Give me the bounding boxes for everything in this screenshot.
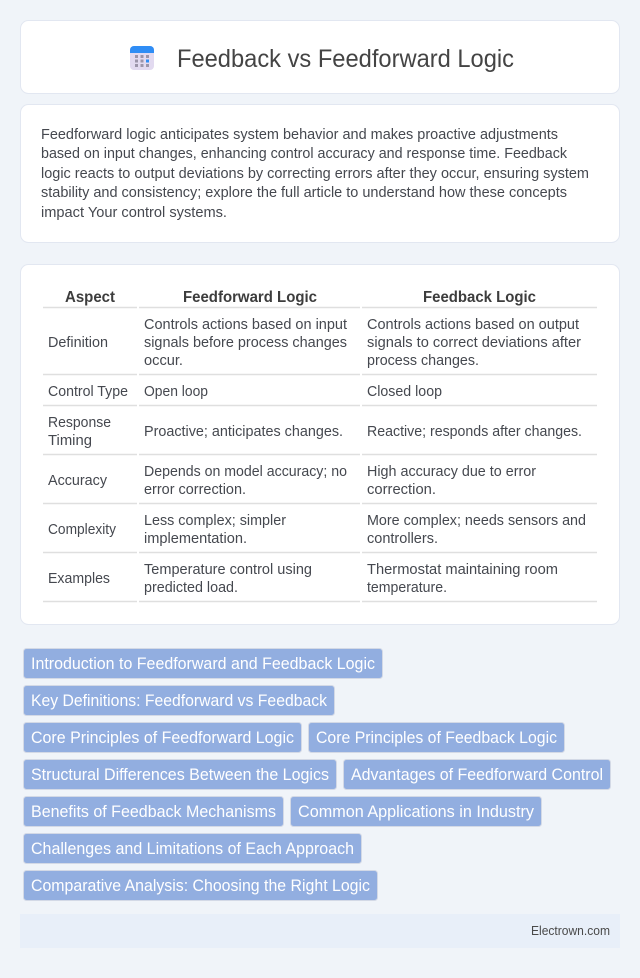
summary text: impact Your control systems.: [41, 205, 227, 221]
row: control type: Open loop: [144, 384, 208, 400]
row: accuracy: High accuracy due to error: [367, 464, 536, 480]
summary text: [41, 127, 589, 221]
tag: introduction: [24, 648, 382, 678]
tag: comparative analysis: [24, 870, 378, 900]
row: definition: occur.: [144, 353, 183, 369]
row: complexity: controllers.: [367, 531, 438, 547]
row: examples: predicted load.: [144, 580, 238, 596]
tag: structural differences: [24, 760, 336, 790]
row: examples: Temperature control using: [144, 562, 312, 578]
tag: key definitions: [24, 686, 334, 716]
tag: challenges: [24, 834, 362, 864]
table header row: Aspect: [65, 289, 115, 306]
row: definition: signals before process changes: [144, 335, 347, 351]
row: control type: [43, 384, 597, 406]
table header row: Feedback Logic: [423, 289, 536, 306]
row: definition: Controls actions based on output: [367, 317, 579, 333]
row: control type: Control Type: [48, 384, 128, 400]
summary text: stability and consistency; explore the full article to understand how these concepts: [41, 185, 567, 201]
tag: comparative analysis: Comparative Analysis: Choosing the Right Logic: [31, 877, 370, 895]
tag: core principles feedback: [308, 722, 564, 752]
row: accuracy: correction.: [367, 482, 436, 498]
row: response timing: [43, 415, 597, 454]
row: definition: process changes.: [367, 353, 479, 369]
summary text: Feedforward logic anticipates system behavior and makes proactive adjustments: [41, 127, 558, 143]
tag: advantages: Advantages of Feedforward Control: [351, 766, 603, 784]
row: complexity: Complexity: [48, 522, 117, 538]
summary text: based on input changes, enhancing control accuracy and response time. Feedback: [41, 146, 568, 162]
tag: key definitions: Key Definitions: Feedforward vs Feedback: [31, 692, 328, 710]
row: definition: [43, 317, 597, 374]
tag: introduction: Introduction to Feedforward and Feedback Logic: [31, 655, 375, 673]
summary text: logic reacts to output deviations by correcting errors after they occur, ensuring system: [41, 166, 589, 182]
row: accuracy: Depends on model accuracy; no: [144, 464, 347, 480]
footer source text: Electrown.com: [531, 924, 610, 938]
row: examples: [43, 562, 597, 602]
row: complexity: implementation.: [144, 531, 247, 547]
row: response timing: Reactive; responds after changes.: [367, 424, 582, 440]
row: definition: Definition: [48, 335, 108, 351]
panel: header: [20, 20, 620, 94]
row: accuracy: [43, 464, 597, 504]
tag: challenges: Challenges and Limitations of Each Approach: [31, 840, 354, 858]
table header row: [43, 289, 597, 308]
tag: applications: [290, 796, 542, 826]
tag: core principles feedforward: Core Principles of Feedforward Logic: [31, 729, 294, 747]
title: Feedback vs Feedforward Logic: [177, 45, 514, 73]
tag: applications: Common Applications in Industry: [298, 803, 535, 821]
panel: comparison table: [20, 264, 620, 624]
panel: summary: [20, 104, 620, 242]
row: response timing: Proactive; anticipates changes.: [144, 424, 343, 440]
tag: benefits: [24, 796, 284, 826]
row: response timing: Timing: [48, 433, 92, 449]
row: examples: Examples: [48, 571, 110, 587]
icon: calendar: [130, 46, 154, 70]
row: examples: temperature.: [367, 580, 447, 596]
tag: benefits: Benefits of Feedback Mechanisms: [31, 803, 276, 821]
footer: [20, 914, 620, 948]
row: examples: Thermostat maintaining room: [367, 562, 558, 578]
row: complexity: Less complex; simpler: [144, 513, 286, 529]
tag: core principles feedforward: [24, 722, 302, 752]
row: definition: Controls actions based on input: [144, 317, 347, 333]
table header row: Feedforward Logic: [183, 289, 317, 306]
row: control type: Closed loop: [367, 384, 442, 400]
row: accuracy: error correction.: [144, 482, 246, 498]
topic tags: [24, 648, 610, 900]
row: accuracy: Accuracy: [48, 473, 108, 489]
row: definition: signals to correct deviations after: [367, 335, 581, 351]
row: response timing: Response: [48, 415, 111, 431]
row: complexity: More complex; needs sensors and: [367, 513, 586, 529]
row: complexity: [43, 513, 597, 552]
tag: advantages: [344, 760, 610, 790]
tag: structural differences: Structural Differences Between the Logics: [31, 766, 329, 784]
tag: core principles feedback: Core Principles of Feedback Logic: [316, 729, 557, 747]
